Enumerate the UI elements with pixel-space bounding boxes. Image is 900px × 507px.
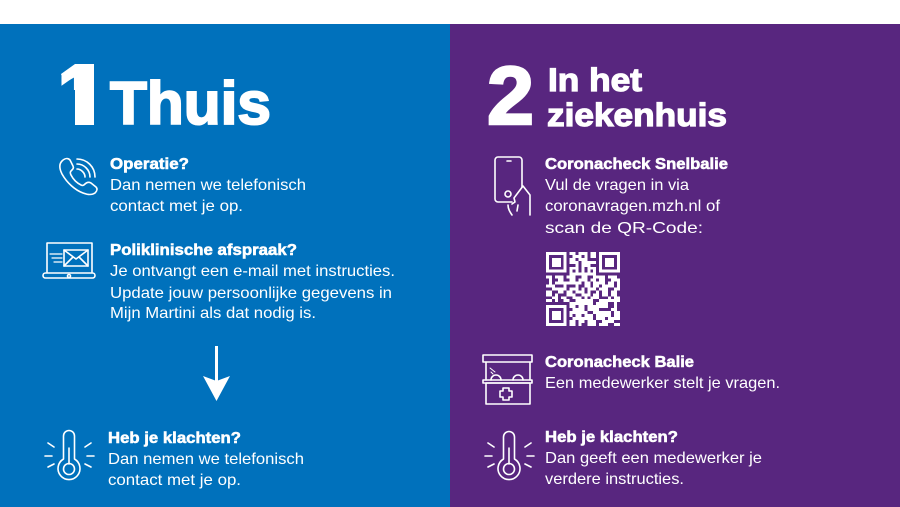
text: operatie: contact met je op. [110, 198, 243, 215]
text: polikliniek: Je ontvangt een e-mail met instructies. [110, 263, 395, 280]
icon: telephone [60, 159, 97, 194]
text: polikliniek: Mijn Martini als dat nodig is. [110, 305, 316, 322]
text: operatie: Operatie? [110, 156, 189, 173]
text: polikliniek: Update jouw persoonlijke gegevens in [110, 285, 392, 302]
text: klachten ziekenhuis: verdere instructies. [545, 471, 684, 488]
text: balie: Coronacheck Balie [545, 354, 694, 371]
icon: laptop with e-mail [43, 243, 95, 278]
text: klachten thuis [108, 430, 304, 489]
text: klachten ziekenhuis: Dan geeft een medewerker je [545, 450, 762, 467]
heading: 1 Thuis [61, 64, 270, 126]
text: polikliniek [110, 242, 395, 322]
arrow: down [203, 346, 230, 401]
text: operatie: Dan nemen we telefonisch [110, 177, 306, 194]
heading: 1 Thuis: Thuis [110, 70, 271, 137]
heading: 2 In het ziekenhuis: In het [548, 62, 642, 98]
icon: thermometer [45, 430, 94, 480]
text: klachten thuis: Dan nemen we telefonisch [108, 451, 304, 468]
text: snelbalie [545, 156, 728, 237]
heading: 2 In het ziekenhuis: 2 [487, 49, 534, 142]
text: klachten thuis: contact met je op. [108, 472, 241, 489]
text: klachten thuis: Heb je klachten? [108, 430, 241, 447]
icon: reception desk with first-aid cross [483, 355, 532, 404]
icon: thermometer [485, 432, 534, 480]
panel: thuis [0, 24, 450, 507]
heading: 2 In het ziekenhuis [487, 49, 727, 142]
text: klachten ziekenhuis [545, 429, 762, 488]
text: snelbalie: Coronacheck Snelbalie [545, 156, 728, 173]
text: snelbalie: Vul de vragen in via [545, 177, 689, 194]
QR code [546, 252, 620, 326]
text: klachten ziekenhuis: Heb je klachten? [545, 429, 678, 446]
heading: 1 Thuis: 1 [57, 48, 99, 142]
text: polikliniek: Poliklinische afspraak? [110, 242, 297, 259]
panel: in het ziekenhuis [450, 24, 900, 507]
text: balie: Een medewerker stelt je vragen. [545, 375, 780, 392]
text: operatie [110, 156, 306, 215]
text: snelbalie: scan de QR-Code: [545, 220, 703, 237]
heading: 2 In het ziekenhuis: ziekenhuis [547, 97, 727, 133]
text: snelbalie: coronavragen.mzh.nl of [545, 198, 721, 215]
text: balie [545, 354, 780, 392]
icon: hand holding phone [495, 157, 530, 215]
